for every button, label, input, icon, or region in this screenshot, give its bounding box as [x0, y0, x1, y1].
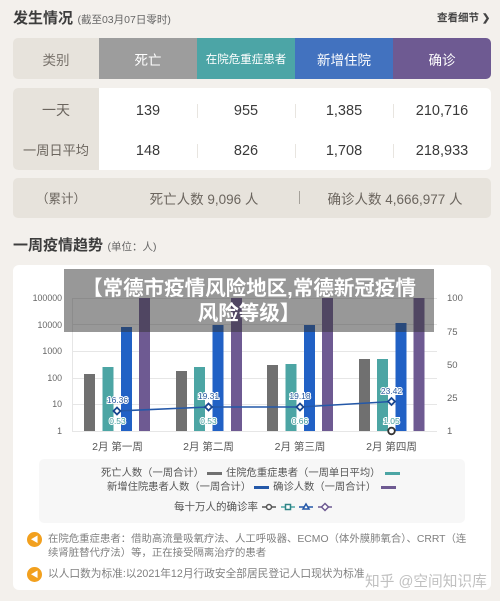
title overlay banner: 【常德市疫情风险地区,常德新冠疫情: [82, 277, 416, 300]
right axis labels: [447, 293, 463, 437]
legend row three: rate markers: [174, 501, 332, 513]
icon: note one speaker: ◀: [30, 535, 38, 544]
icon: note two speaker: [27, 567, 42, 582]
header: deaths: [99, 38, 197, 79]
bars: week three: [267, 298, 333, 431]
header: critical patients: 在院危重症患者: [206, 54, 286, 66]
note: critical patients definition: 在院危重症患者：借助高流量吸氧疗法、人工呼吸器、ECMO（体外膜肺氧合）、CRRT（连: [48, 534, 466, 545]
cumulative label: （累计）: [36, 192, 86, 206]
legend row two: 新增住院患者人数（一周合计） 确诊人数（一周合计）: [107, 482, 376, 493]
x axis labels: 2月 第一周: [92, 440, 143, 453]
rate value labels: 23.42: [381, 386, 402, 396]
legend row three: rate markers: 每十万人的确诊率: [174, 501, 258, 513]
left axis labels: [33, 293, 62, 436]
row label: one day: 一天: [42, 102, 70, 118]
note: critical patients definition: [48, 533, 466, 558]
icon: note two speaker: ◀: [30, 570, 38, 579]
panel: chart: [13, 265, 491, 590]
row two values: 1,708: [326, 143, 362, 159]
left axis labels: 100000: [33, 293, 62, 303]
combo bar and line chart: 0.53: [200, 416, 217, 426]
bars: week one: [84, 298, 150, 431]
right axis labels: 50: [447, 360, 458, 371]
title overlay banner: [64, 269, 434, 332]
row one values: 210,716: [416, 103, 468, 119]
left axis labels: 1000: [42, 346, 62, 356]
right axis labels: 25: [447, 393, 458, 404]
combo bar and line chart: 0.53: [109, 416, 126, 426]
row one values: [136, 103, 468, 119]
panel: legend: [39, 459, 465, 523]
header: deaths: 死亡: [134, 52, 162, 68]
rate value labels: [107, 386, 402, 405]
left axis labels: 1: [57, 426, 62, 436]
header: confirmed: 确诊: [428, 52, 456, 68]
x axis labels: 2月 第三周: [275, 440, 325, 453]
legend row one: 死亡人数（一周合计） 住院危重症患者（一周单日平均）: [101, 468, 380, 479]
x axis labels: 2月 第四周: [366, 440, 417, 453]
combo bar and line chart: 1.05: [383, 416, 400, 426]
heading: weekly trend: 一周疫情趋势 (单位：人): [13, 237, 156, 254]
table header row: [13, 38, 491, 79]
icon: note one speaker: [27, 532, 42, 547]
row two values: 148: [136, 143, 160, 159]
row one values: 1,385: [326, 103, 362, 119]
row one values: 139: [136, 103, 160, 119]
header: category: 类别: [42, 52, 70, 68]
data table: [13, 88, 491, 170]
rate value labels: 16.36: [107, 395, 128, 405]
x axis labels: [92, 440, 417, 453]
link: view details: 查看细节 ❯: [437, 12, 490, 24]
watermark: 知乎 @空间知识库: [365, 574, 487, 590]
x axis labels: 2月 第二周: [183, 440, 234, 453]
rate line with markers: [114, 398, 395, 434]
header: confirmed: [393, 38, 491, 79]
rate value labels: 19.18: [289, 391, 311, 401]
left axis labels: 100: [47, 373, 62, 383]
row label: daily average: 一周日平均: [23, 142, 89, 158]
right axis labels: 100: [447, 293, 463, 304]
note: critical patients definition: 续肾脏替代疗法）等，正在接受隔离治疗的患者: [48, 548, 266, 558]
left axis labels: 10: [52, 399, 62, 409]
heading: situation: 发生情况 (截至03月07日零时): [13, 10, 171, 27]
note: population standard: 以人口数为标准:以2021年12月行政安全部居民登记人口现状为标准: [48, 568, 365, 580]
cumulative confirmed: 确诊人数 4,666,977 人: [327, 192, 463, 206]
bars: week four: [359, 298, 424, 431]
header: new admissions: 新增住院: [317, 52, 371, 68]
header: critical patients: [197, 38, 295, 79]
bars: week two: [176, 298, 242, 431]
row labels column: [13, 88, 99, 170]
cumulative deaths: 死亡人数 9,096 人: [150, 192, 258, 206]
row two values: 218,933: [416, 143, 468, 159]
title overlay banner: 风险等级】: [198, 302, 300, 325]
right axis labels: 1: [447, 426, 452, 437]
row one values: 955: [234, 103, 258, 119]
row two values: 826: [234, 143, 258, 159]
cumulative row: [13, 178, 491, 218]
combo bar and line chart: 0.66: [292, 416, 309, 426]
left axis labels: 10000: [38, 320, 62, 330]
right axis labels: 75: [447, 327, 458, 338]
header: new admissions: [295, 38, 393, 79]
row two values: [136, 143, 468, 159]
rate value labels: 19.31: [198, 391, 219, 401]
